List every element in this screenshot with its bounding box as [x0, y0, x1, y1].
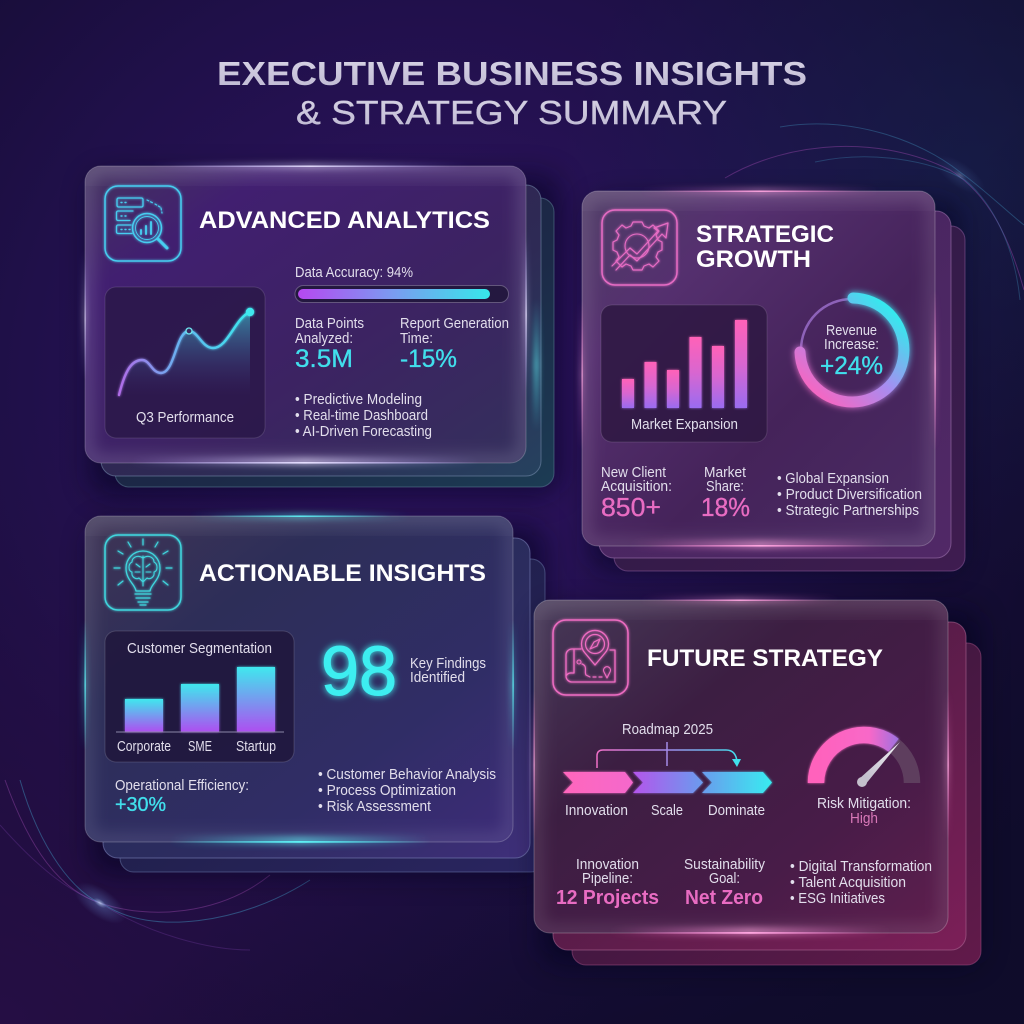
stat: new client acquisition [601, 465, 672, 522]
donut chart: revenue increase [800, 298, 904, 402]
bullet list: • Global Expansion [777, 471, 889, 487]
stat: innovation pipeline: Pipeline: [582, 871, 633, 887]
data accuracy progress bar [295, 265, 508, 302]
bullet list: • Risk Assessment [318, 799, 431, 815]
stat: operational efficiency [115, 778, 249, 816]
stat: innovation pipeline: Innovation [576, 857, 639, 873]
icon: lightbulb with brain [105, 535, 181, 610]
heading: ADVANCED ANALYTICS [199, 207, 490, 234]
bar chart: customer segmentation: SME [188, 739, 212, 755]
stat: new client acquisition: 850+ [601, 492, 661, 522]
roadmap timeline [563, 722, 772, 819]
stat: sustainability goal: Net Zero [685, 887, 763, 909]
panel: advanced analytics [83, 164, 560, 495]
stat: innovation pipeline: 12 Projects [556, 887, 659, 909]
line chart: Q3 performance: Q3 Performance [136, 410, 234, 426]
bar chart: customer segmentation: Corporate [117, 739, 171, 755]
donut chart: revenue increase: Revenue [826, 323, 877, 339]
gauge: risk mitigation: Risk Mitigation: [817, 796, 911, 812]
stat: operational efficiency: +30% [115, 794, 166, 816]
heading: ACTIONABLE INSIGHTS [199, 560, 486, 587]
roadmap timeline: Dominate [708, 803, 765, 819]
stat: sustainability goal [684, 857, 766, 909]
stat: data points analyzed: Analyzed: [295, 331, 353, 347]
bullet list [295, 392, 432, 440]
bullet list: • Digital Transformation [790, 859, 932, 875]
bullet list [318, 767, 496, 815]
heading: STRATEGIC [696, 221, 834, 248]
stat: new client acquisition: New Client [601, 465, 666, 481]
stat: market share: Share: [706, 479, 744, 495]
bullet list: • Talent Acquisition [790, 875, 906, 891]
title: & STRATEGY SUMMARY [296, 94, 727, 131]
stat: new client acquisition: Acquisition: [601, 479, 672, 495]
title: EXECUTIVE BUSINESS INSIGHTS [217, 55, 807, 92]
gauge: risk mitigation [816, 735, 912, 827]
stat: data points analyzed: 3.5M [295, 345, 353, 373]
stat: key findings: 98 [321, 632, 397, 710]
icon: map with compass pin [553, 620, 628, 695]
bar chart: customer segmentation: Customer Segmentation [127, 641, 272, 657]
stat: key findings: Key Findings [410, 656, 486, 672]
stat: report generation time: Report Generation [400, 316, 509, 332]
stat: innovation pipeline [556, 857, 659, 909]
heading: GROWTH [696, 246, 811, 273]
bar chart: market expansion [601, 305, 767, 442]
bullet list [777, 471, 922, 519]
bullet list: • Predictive Modeling [295, 392, 422, 408]
stat: market share: Market [704, 465, 746, 481]
donut chart: revenue increase: Increase: [824, 337, 879, 353]
donut chart: revenue increase: +24% [820, 352, 883, 380]
roadmap timeline: Innovation [565, 803, 628, 819]
stat: data points analyzed [295, 316, 364, 373]
bullet list: • Process Optimization [318, 783, 456, 799]
stat: market share [701, 465, 750, 522]
heading: FUTURE STRATEGY [647, 645, 883, 672]
bullet list: • Real-time Dashboard [295, 408, 428, 424]
bullet list: • AI-Driven Forecasting [295, 424, 432, 440]
stat: key findings: Identified [410, 670, 465, 686]
stat: operational efficiency: Operational Efficiency: [115, 778, 249, 794]
roadmap timeline: Scale [651, 803, 683, 819]
data accuracy progress bar: Data Accuracy: 94% [295, 265, 413, 281]
bar chart: customer segmentation [105, 631, 294, 762]
bullet list: • ESG Initiatives [790, 891, 885, 907]
stat: sustainability goal: Sustainability [684, 857, 766, 873]
panel: strategic growth [580, 189, 965, 571]
bullet list [790, 859, 932, 907]
gauge: risk mitigation: High [850, 811, 878, 827]
heading [696, 221, 834, 273]
bullet list: • Customer Behavior Analysis [318, 767, 496, 783]
bar chart: customer segmentation: Startup [236, 739, 276, 755]
roadmap timeline: Roadmap 2025 [622, 722, 713, 738]
panel: future strategy [532, 598, 981, 965]
stat: report generation time: Time: [400, 331, 433, 347]
stat: key findings [321, 632, 486, 710]
panel: actionable insights [83, 514, 545, 875]
bullet list: • Strategic Partnerships [777, 503, 919, 519]
stat: report generation time: -15% [400, 345, 457, 373]
icon: server analytics magnifier [105, 186, 181, 261]
bullet list: • Product Diversification [777, 487, 922, 503]
title [217, 55, 807, 131]
stat: market share: 18% [701, 492, 750, 522]
stat: sustainability goal: Goal: [709, 871, 740, 887]
bar chart: market expansion: Market Expansion [631, 417, 738, 433]
stat: report generation time [400, 316, 509, 373]
line chart: Q3 performance [105, 287, 265, 438]
stat: data points analyzed: Data Points [295, 316, 364, 332]
icon: gear with growth arrow [602, 210, 677, 285]
